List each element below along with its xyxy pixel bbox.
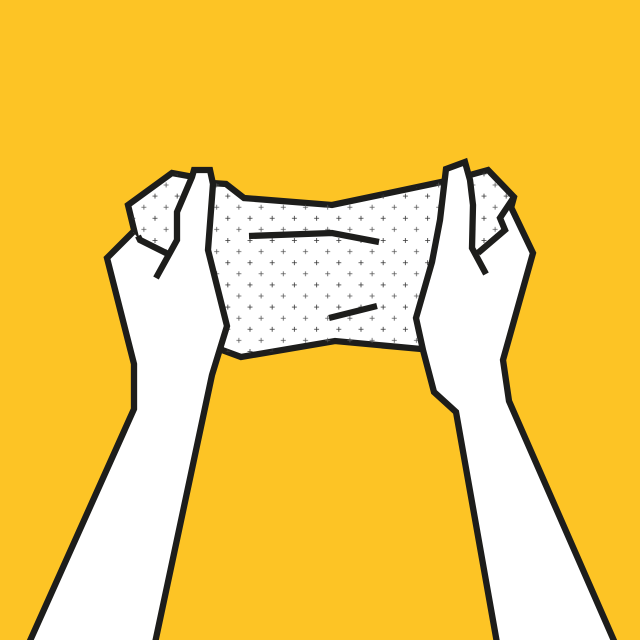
cloth wrinkle: upper xyxy=(249,233,379,242)
right hand xyxy=(416,162,615,640)
cloth wrinkle: lower xyxy=(329,306,377,318)
left hand xyxy=(29,170,227,640)
cloth xyxy=(128,170,514,357)
